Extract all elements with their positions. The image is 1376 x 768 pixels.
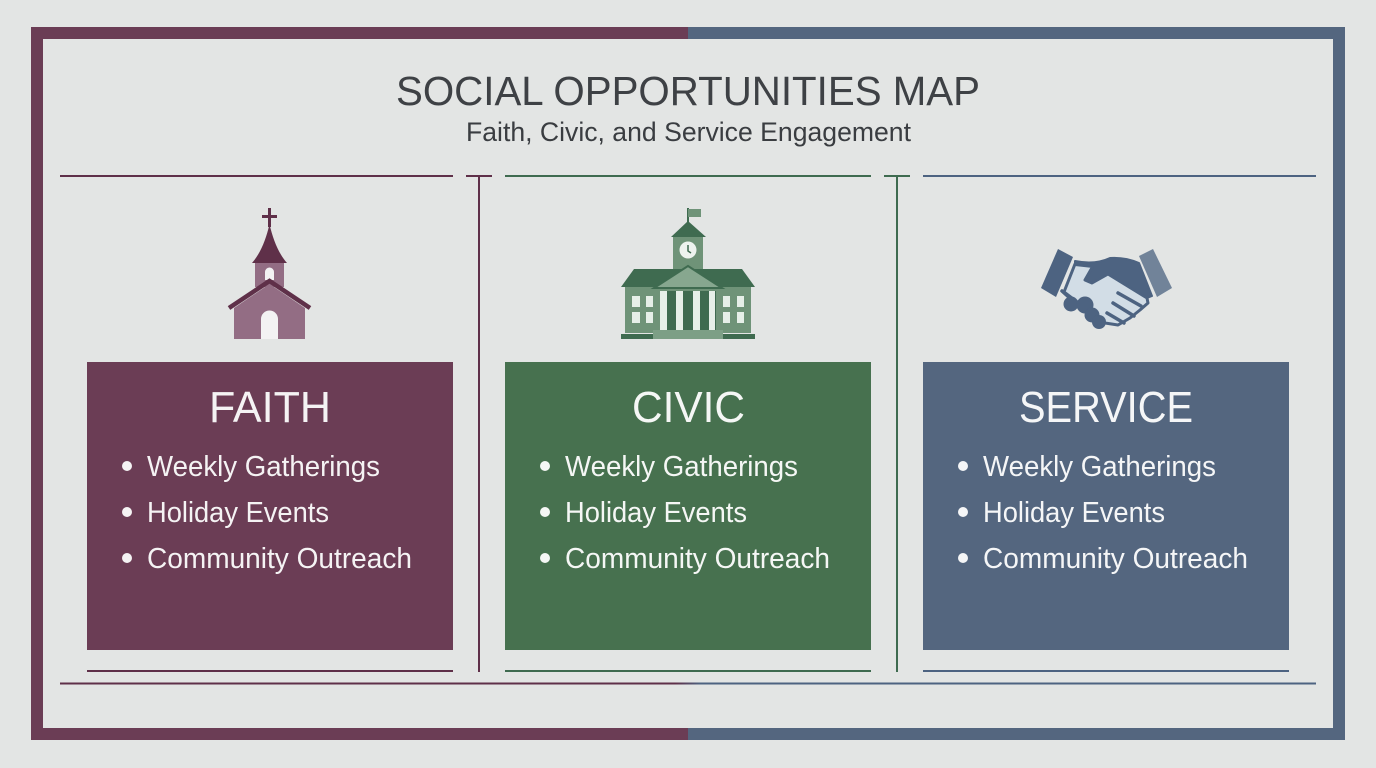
list: faith: Holiday Events — [147, 497, 329, 529]
icon: handshake — [1041, 249, 1172, 329]
heading: faith: FAITH — [209, 383, 331, 432]
list: faith — [122, 451, 412, 575]
list: civic: Weekly Gatherings — [565, 451, 798, 483]
list: service — [958, 451, 1248, 575]
panel: service — [923, 362, 1289, 650]
list: faith: Weekly Gatherings — [147, 451, 380, 483]
list: civic — [540, 451, 830, 575]
subtitle: Faith, Civic, and Service Engagement — [466, 117, 911, 147]
list: service: Holiday Events — [983, 497, 1165, 529]
list: civic: Community Outreach — [565, 543, 830, 575]
rules and dividers — [60, 176, 1316, 684]
heading: civic: CIVIC — [632, 383, 745, 432]
icon: civic building — [621, 208, 755, 339]
title: SOCIAL OPPORTUNITIES MAP — [396, 68, 980, 114]
list: faith: Community Outreach — [147, 543, 412, 575]
heading: service: SERVICE — [1019, 383, 1193, 432]
icon: church — [229, 208, 310, 339]
panel: civic — [505, 362, 871, 650]
list: service: Community Outreach — [983, 543, 1248, 575]
panel: faith — [87, 362, 453, 650]
list: civic: Holiday Events — [565, 497, 747, 529]
list: service: Weekly Gatherings — [983, 451, 1216, 483]
